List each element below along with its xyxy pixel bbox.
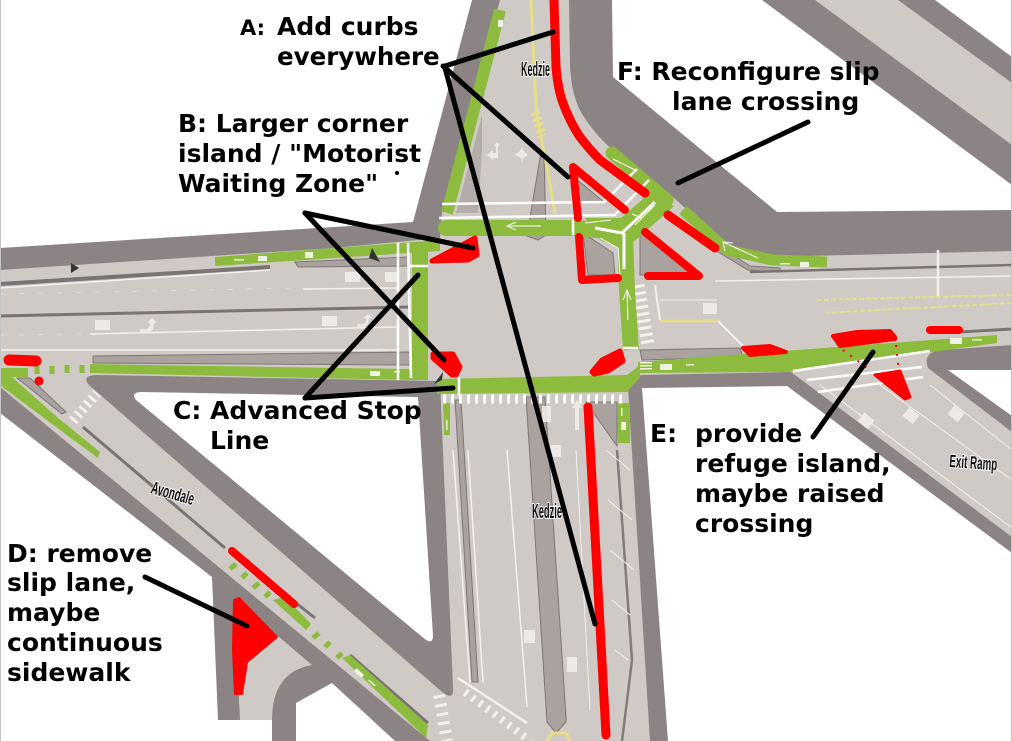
label C: Line <box>210 426 269 455</box>
curb stub E east <box>930 326 959 334</box>
label B: Waiting Zone" <box>178 169 378 198</box>
label D: maybe <box>7 598 100 627</box>
leader B to south island <box>305 213 444 360</box>
refuge island E north <box>833 331 895 346</box>
label D: continuous <box>7 628 163 657</box>
green dashed bike lane <box>37 365 342 658</box>
leader E <box>813 352 873 437</box>
leader A to north curb <box>445 32 553 66</box>
yellow centre markings <box>531 0 1012 741</box>
south west corner apron <box>236 636 312 720</box>
leader C to west stop line <box>305 275 418 398</box>
leader F <box>678 122 808 183</box>
label E: refuge island, <box>695 449 891 478</box>
infographic: annotated street intersection plan: Kedzie <box>521 59 550 81</box>
infographic: annotated street intersection plan: Kedzie <box>532 501 562 523</box>
curb: north Kedzie east side <box>554 0 645 193</box>
corner island B south <box>433 354 460 375</box>
label E: maybe raised <box>695 479 885 508</box>
island: slip lane removal D <box>233 598 277 694</box>
leader B to north island <box>305 213 473 248</box>
slip lane triangle north <box>573 167 625 218</box>
curb: south Kedzie <box>588 407 606 735</box>
label A: Add curbs <box>277 12 419 41</box>
label A: A: <box>240 16 265 40</box>
label E: crossing <box>695 509 813 538</box>
block between Avondale and south Kedzie <box>86 375 453 696</box>
west red dot <box>35 377 43 385</box>
south east corner island <box>592 351 623 374</box>
label E: provide <box>695 419 802 448</box>
road markings <box>0 250 1012 741</box>
lane stencils <box>95 142 965 672</box>
curb: Avondale <box>232 551 294 604</box>
stray dot <box>395 171 399 175</box>
corner island B north <box>432 238 477 261</box>
curb: east slip lane <box>668 215 715 248</box>
upper right diagonal road <box>815 0 1012 145</box>
leader A to south curb <box>445 68 595 624</box>
street direction arrowheads <box>71 248 443 384</box>
dotted refuge outline <box>843 345 899 372</box>
leader D <box>145 577 247 626</box>
label B: island / "Motorist <box>178 139 421 168</box>
label A: everywhere <box>277 42 440 71</box>
label B: B: Larger corner <box>178 109 409 138</box>
slip lane triangle east <box>645 232 699 276</box>
label D: sidewalk <box>7 658 132 687</box>
street name: Avondale: Avondale <box>149 478 197 509</box>
white stop lines and bike arrows <box>398 159 930 399</box>
label F: F: Reconfigure slip <box>617 57 880 86</box>
leader C to south stop line <box>305 388 453 398</box>
label D: slip lane, <box>7 568 135 597</box>
label F: lane crossing <box>672 87 859 116</box>
label D: D: remove <box>7 539 152 568</box>
callout lines <box>145 32 873 626</box>
west curb stub <box>9 360 36 361</box>
label C: C: Advanced Stop <box>173 396 422 425</box>
curb bump E west <box>743 346 786 355</box>
slip lane triangle south <box>579 237 618 280</box>
leader A to triangle <box>443 66 568 177</box>
refuge island E south <box>875 371 910 399</box>
small bike lane icons <box>234 20 982 686</box>
label E: E: <box>650 419 677 448</box>
